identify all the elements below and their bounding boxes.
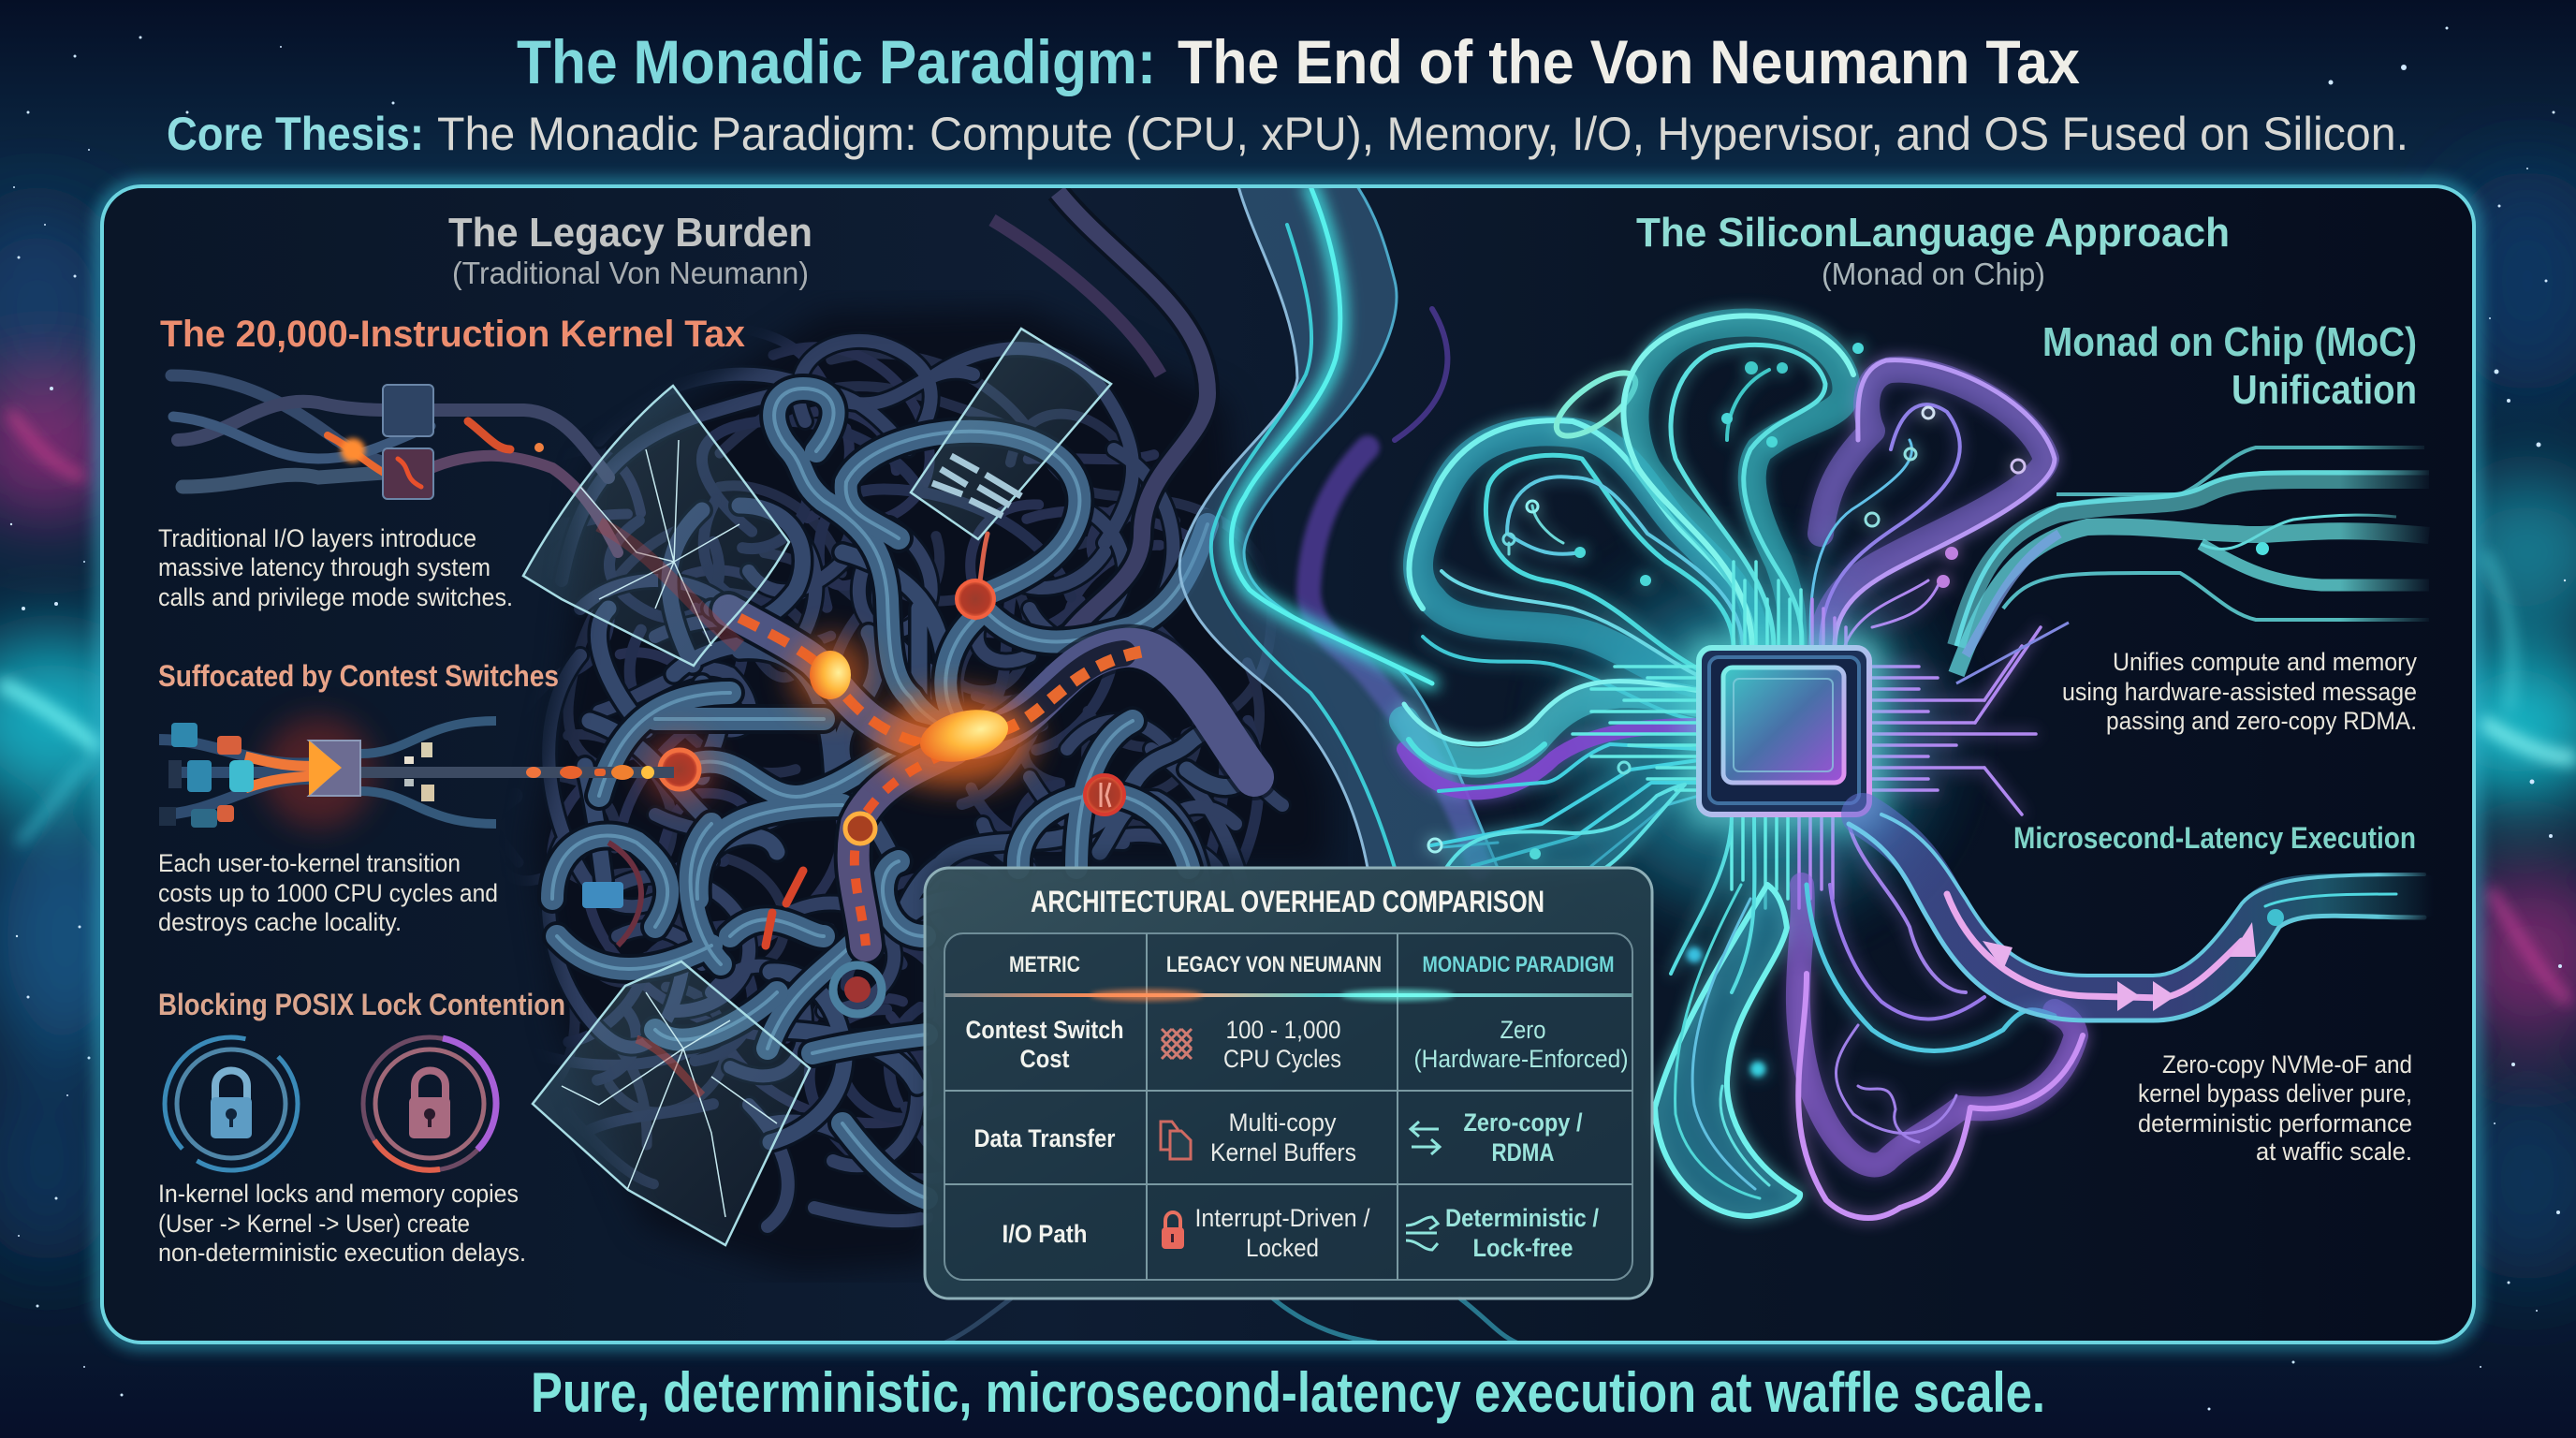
chip pins (1573, 562, 1801, 908)
right purple lobe (1810, 360, 2055, 648)
row: contest switch cost (966, 1016, 1629, 1073)
icon: red lock (1162, 1212, 1184, 1249)
row: contest switch cost: Contest Switch (966, 1016, 1123, 1044)
text: contest switches description: destroys cache locality. (158, 908, 402, 936)
table header row: METRIC (1009, 952, 1080, 977)
row: i/o path: Interrupt-Driven / (1194, 1204, 1370, 1232)
heading: legacy burden (448, 210, 812, 290)
text: latency description: deterministic performance (2138, 1109, 2412, 1137)
text: posix lock description: In-kernel locks and memory copies (158, 1180, 519, 1208)
left upper lobe (1409, 420, 1754, 721)
heading: siliconlanguage approach (1636, 210, 2230, 291)
icon: hot kernel box (383, 448, 433, 499)
row: i/o path: Lock-free (1473, 1234, 1573, 1262)
illustration: legacy tangled wires (532, 188, 1331, 1276)
illustration: flowing ribbons (945, 186, 1516, 1343)
left lower bands (1404, 682, 1699, 868)
heading: microsecond latency: Microsecond-Latency Execution (2013, 821, 2416, 855)
table header row (1009, 952, 1614, 977)
illustration: hot orange data flow (728, 534, 1254, 946)
icon: shard one (523, 386, 789, 666)
heading: siliconlanguage approach: (Monad on Chip) (1822, 257, 2045, 291)
icon: copied documents (1161, 1122, 1191, 1159)
heading: legacy burden: The Legacy Burden (448, 210, 812, 256)
text: kernel tax description: calls and privilege mode switches. (158, 583, 513, 611)
row: contest switch cost: 100 - 1,000 (1226, 1016, 1340, 1044)
illustration: kernel tax cables (171, 375, 618, 552)
icon: red padlock ring (363, 1037, 496, 1170)
heading: monad on chip: Unification (2232, 367, 2417, 413)
text: latency description (2138, 1050, 2412, 1166)
row: i/o path: Locked (1246, 1234, 1319, 1262)
text: contest switches description: costs up to 1000 CPU cycles and (158, 879, 498, 907)
row: i/o path (1002, 1204, 1599, 1262)
text: moc description: Unifies compute and memory (2113, 648, 2417, 676)
text: posix lock description (158, 1180, 526, 1267)
icon: switch gate (309, 741, 360, 796)
heading: legacy burden: (Traditional Von Neumann) (452, 256, 809, 290)
row: data transfer: RDMA (1492, 1138, 1554, 1167)
icon: lock-free routes (1406, 1217, 1438, 1250)
icon: blue padlock ring (165, 1037, 298, 1170)
title: The Monadic Paradigm: (517, 27, 1156, 96)
row: data transfer: Multi-copy (1228, 1108, 1337, 1137)
text: posix lock description: (User -> Kernel -> User) create (158, 1210, 470, 1238)
icon: shard three (533, 961, 810, 1245)
comparison table card (925, 868, 1652, 1299)
illustration: cracked glass shards (523, 329, 1111, 1245)
row: data transfer: Kernel Buffers (1210, 1138, 1356, 1167)
row: data transfer: Data Transfer (973, 1124, 1116, 1152)
glow behind brain (1582, 580, 1919, 899)
illustration: context switch funnel (159, 716, 674, 829)
text: kernel tax description: massive latency through system (158, 553, 490, 581)
text: latency description: kernel bypass deliver pure, (2138, 1079, 2412, 1108)
illustration: upper right data streams (1956, 448, 2429, 683)
central arch lobe (1623, 315, 1864, 648)
main panel frame (102, 186, 2474, 1343)
table title: ARCHITECTURAL OVERHEAD COMPARISON (1031, 885, 1544, 918)
heading: monad on chip (2042, 319, 2417, 413)
heading: monad on chip: Monad on Chip (MoC) (2042, 319, 2417, 365)
icon: shard two (911, 329, 1111, 539)
icon: exchange arrows (1411, 1122, 1440, 1154)
text: moc description (2062, 648, 2417, 735)
illustration: silicon brain (1404, 315, 2083, 1218)
text: moc description: using hardware-assisted message (2062, 678, 2417, 706)
heading: siliconlanguage approach: The SiliconLanguage Approach (1636, 210, 2230, 256)
row: data transfer (973, 1108, 1583, 1167)
row: contest switch cost: Cost (1020, 1045, 1070, 1073)
text: kernel tax description (158, 524, 513, 611)
illustration: latency tube with arrows (1849, 814, 2424, 1020)
lower teal lobe (1655, 814, 1800, 1216)
text: posix lock description: non-deterministic execution delays. (158, 1239, 526, 1267)
table header row: MONADIC PARADIGM (1423, 952, 1614, 977)
core thesis subtitle: Core Thesis: (167, 108, 424, 160)
row: i/o path: I/O Path (1002, 1220, 1088, 1248)
icon: flow arrows (1983, 922, 2256, 1011)
illustration: brain glow (1404, 315, 2083, 1218)
row: data transfer: Zero-copy / (1464, 1108, 1583, 1137)
row: contest switch cost: Zero (1500, 1016, 1546, 1044)
icon: kernel box (383, 385, 433, 436)
heading: posix lock: Blocking POSIX Lock Contention (158, 988, 565, 1021)
footer tagline: Pure, deterministic, microsecond-latency execution at waffle scale. (531, 1361, 2045, 1424)
row: i/o path: Deterministic / (1445, 1204, 1599, 1232)
icon: tangled cross hatch (1162, 1029, 1192, 1059)
chip (1685, 637, 1883, 829)
heading: kernel tax: The 20,000-Instruction Kernel Tax (160, 314, 745, 355)
core thesis subtitle: The Monadic Paradigm: Compute (CPU, xPU), Memory, I/O, Hypervisor, and OS Fused on Silicon. (437, 108, 2408, 160)
heading: contest switches: Suffocated by Contest Switches (158, 659, 559, 693)
table grid (944, 933, 1632, 1280)
table header row: LEGACY VON NEUMANN (1166, 952, 1382, 977)
text: latency description: Zero-copy NVMe-oF and (2162, 1050, 2412, 1078)
illustration: hot nodes (582, 580, 1124, 1014)
row: contest switch cost: CPU Cycles (1223, 1045, 1341, 1073)
lower purple lobe (1798, 824, 2083, 1218)
title: The End of the Von Neumann Tax (1178, 27, 2080, 96)
text: contest switches description: Each user-to-kernel transition (158, 849, 461, 877)
row: contest switch cost: (Hardware-Enforced) (1413, 1045, 1629, 1073)
title (517, 27, 2080, 96)
text: latency description: at waffic scale. (2256, 1137, 2412, 1166)
text: moc description: passing and zero-copy RDMA. (2106, 707, 2417, 735)
halo lobe (1547, 361, 1645, 448)
text: contest switches description (158, 849, 498, 936)
text: kernel tax description: Traditional I/O layers introduce (158, 524, 476, 552)
